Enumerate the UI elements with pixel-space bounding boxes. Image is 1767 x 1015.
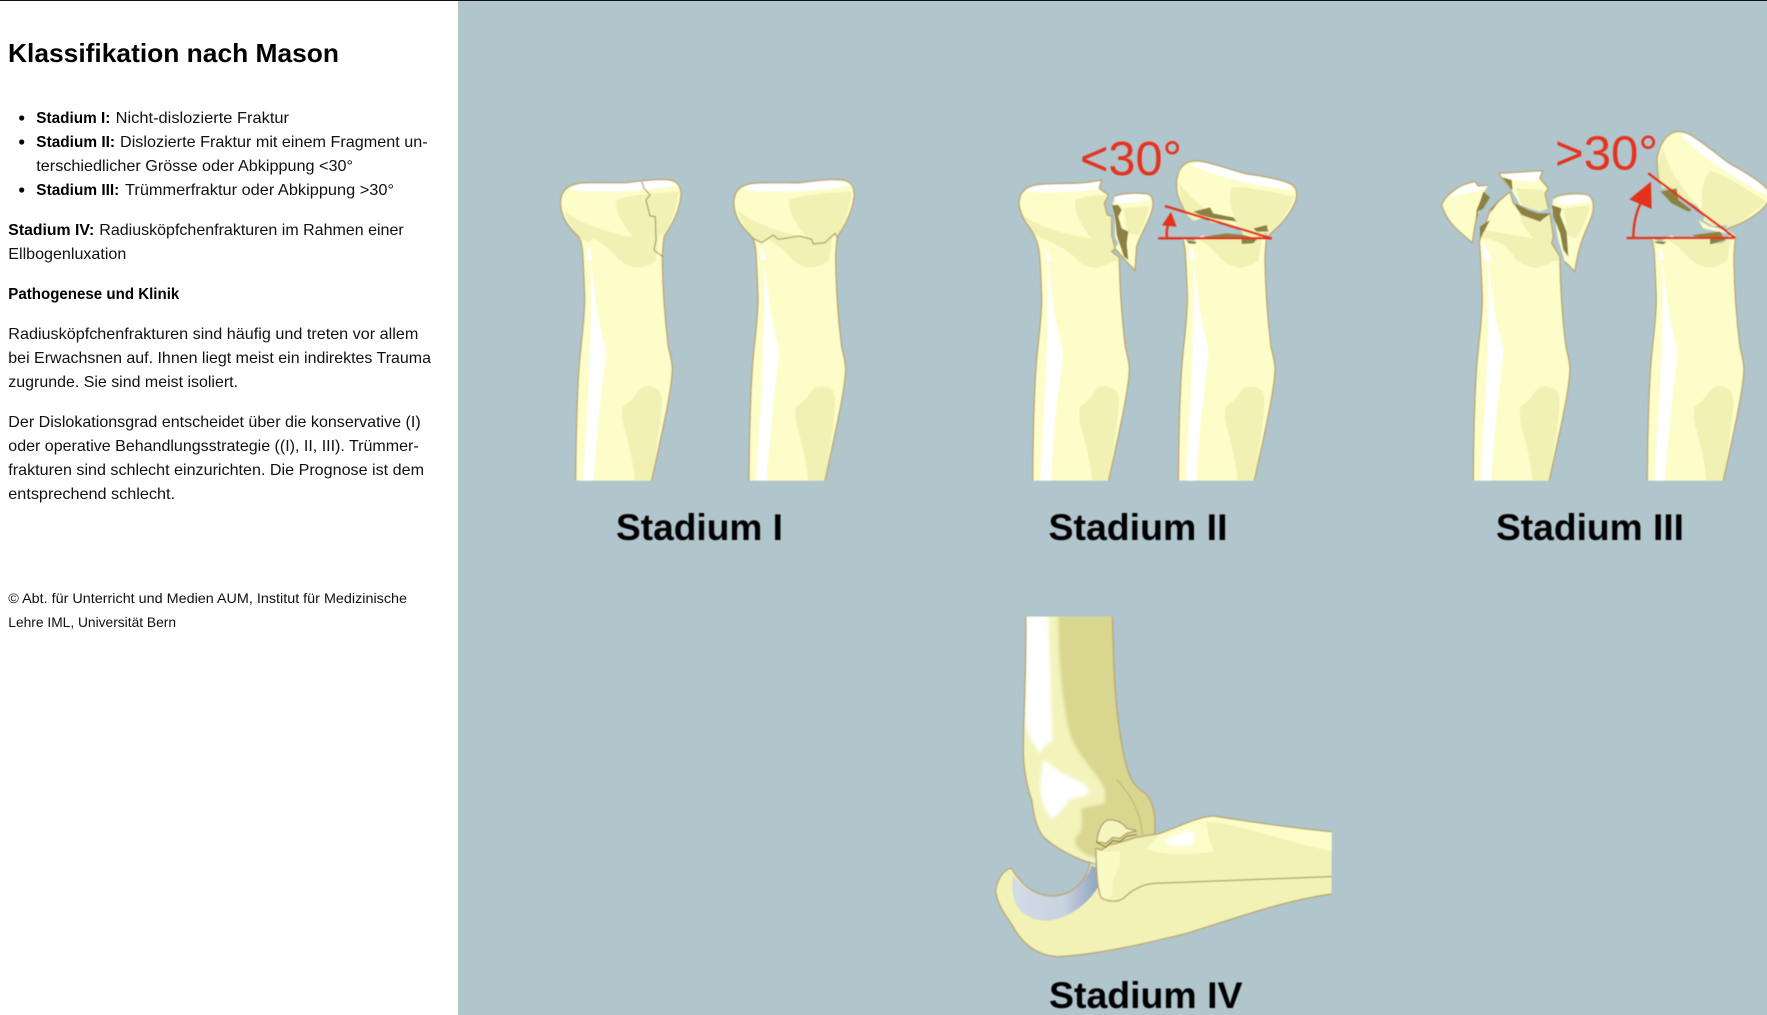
bone: stage I left, longitudinal fracture (561, 180, 681, 481)
stage IV text: Ellbogenluxation (8, 246, 126, 263)
bone: stage III left, comminuted fracture (1442, 171, 1593, 481)
copyright: © Abt. für Unterricht und Medien AUM, Institut für Medizinische (8, 590, 407, 606)
angle marker: less than 30 degrees (1080, 133, 1272, 238)
paragraph: pathogenesis: zugrunde. Sie sind meist isoliert. (8, 374, 238, 391)
paragraph: pathogenesis: bei Erwachsnen auf. Ihnen liegt meist ein indirektes Trauma (8, 350, 431, 367)
label: Stadium II: Stadium II (1048, 507, 1228, 548)
stage list: Dislozierte Fraktur mit einem Fragment un- (120, 134, 428, 151)
paragraph: treatment: frakturen sind schlecht einzurichten. Die Prognose ist dem (8, 462, 424, 479)
angle marker: greater than 30 degrees (1555, 127, 1735, 238)
angle marker: less than 30 degrees: <30° (1080, 133, 1182, 186)
stage list: Nicht-dislozierte Fraktur (116, 110, 290, 127)
bone: stage III right, strongly tilted head (1640, 121, 1767, 481)
bone: stage II right, tilted head (1166, 153, 1300, 481)
title: Klassifikation nach Mason (8, 38, 339, 68)
stage IV text: Stadium IV: (8, 222, 94, 239)
subheading: Pathogenese und Klinik (8, 286, 179, 303)
paragraph: pathogenesis (8, 326, 431, 391)
bone: stage II left, displaced fragment (1019, 180, 1153, 481)
copyright: Lehre IML, Universität Bern (8, 614, 176, 630)
stage IV text (8, 222, 404, 263)
paragraph: treatment: oder operative Behandlungsstrategie ((I), II, III). Trümmer- (8, 438, 419, 455)
copyright (8, 590, 407, 630)
paragraph: pathogenesis: Radiusköpfchenfrakturen sind häufig und treten vor allem (8, 326, 418, 343)
stage list: terschiedlicher Grösse oder Abkippung <30° (36, 158, 353, 175)
stage IV text: Radiusköpfchenfrakturen im Rahmen einer (99, 222, 404, 239)
illustrations (561, 121, 1767, 1015)
paragraph: treatment: Der Dislokationsgrad entscheidet über die konservative (I) (8, 414, 421, 431)
radius shaft (1096, 816, 1332, 901)
label: Stadium III: Stadium III (1496, 507, 1684, 548)
illustration panel (458, 0, 1767, 1015)
paragraph: treatment (8, 414, 424, 503)
label: Stadium IV: Stadium IV (1049, 975, 1243, 1015)
stage list: Stadium I: (36, 110, 110, 127)
label: Stadium I: Stadium I (616, 507, 783, 548)
angle marker: greater than 30 degrees: >30° (1555, 127, 1658, 180)
ulna (996, 863, 1332, 957)
bone: stage IV elbow dislocation (996, 613, 1332, 957)
stage list: Stadium III: (36, 182, 119, 199)
radius head fragment (1097, 820, 1137, 843)
paragraph: treatment: entsprechend schlecht. (8, 486, 175, 503)
humerus (1023, 613, 1158, 863)
stage list: Stadium II: (36, 134, 115, 151)
stage list: Trümmerfraktur oder Abkippung >30° (125, 182, 394, 199)
bone: stage I right, transverse fracture (734, 180, 854, 481)
stage list (19, 110, 428, 199)
